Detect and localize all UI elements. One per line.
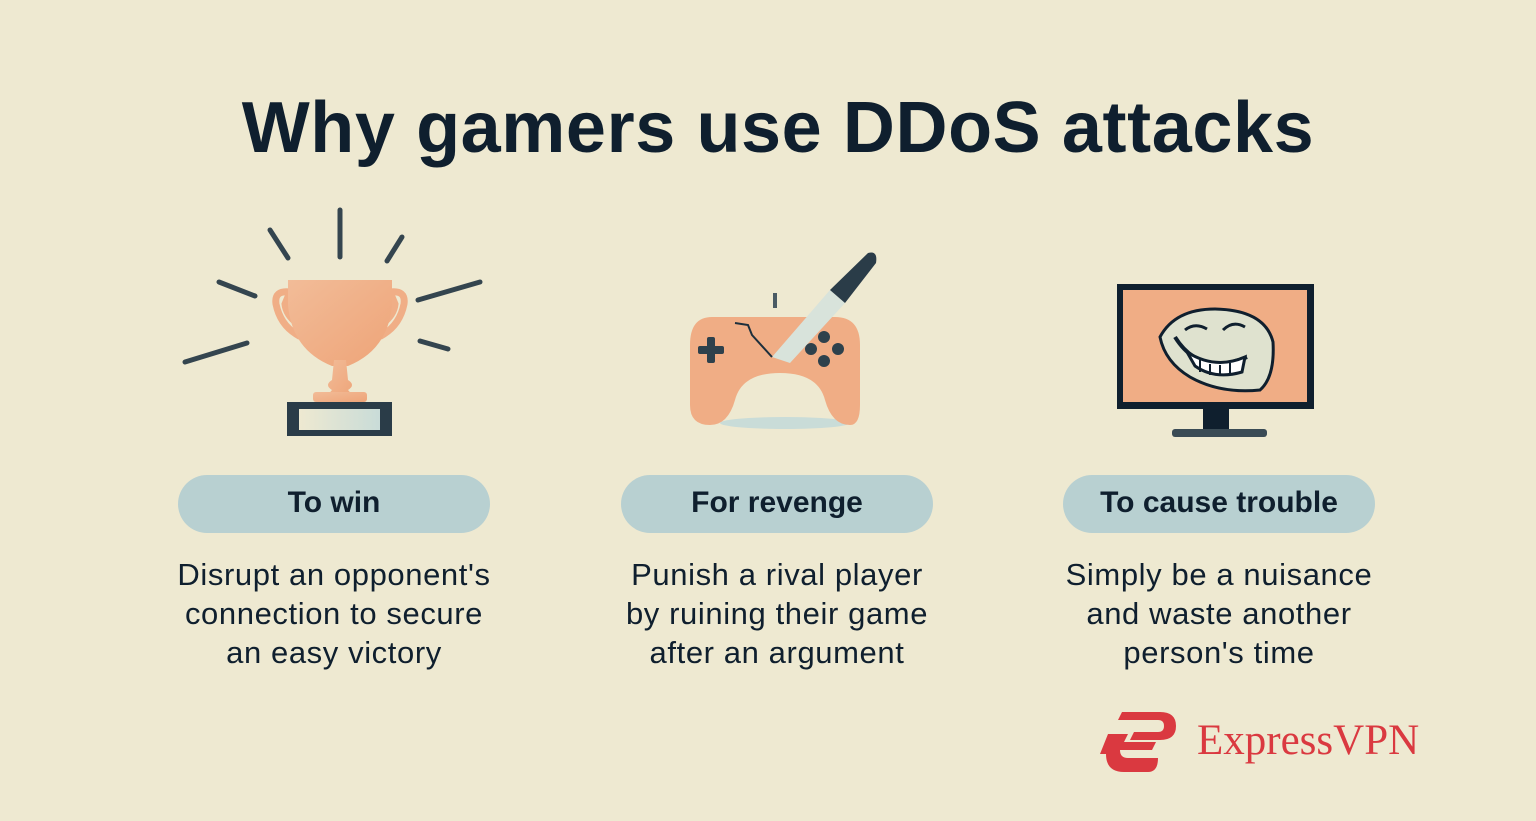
title: Why gamers use DDoS attacks: [242, 88, 1314, 168]
text: trouble description: Simply be a nuisance: [1066, 557, 1372, 592]
icon: monitor with troll face: [1117, 284, 1314, 437]
icon: trophy: [182, 208, 482, 436]
logo: ExpressVPN: ExpressVPN: [1197, 717, 1419, 764]
text: to win description: an easy victory: [226, 635, 442, 670]
text: to win description: Disrupt an opponent's: [177, 557, 491, 592]
logo: ExpressVPN: [1100, 712, 1419, 772]
text: revenge description: [626, 557, 928, 670]
pill: For revenge: [621, 475, 933, 533]
pill: To win: To win: [288, 486, 380, 519]
text: trouble description: person's time: [1123, 635, 1315, 670]
pill: For revenge: For revenge: [691, 486, 863, 519]
pill: To cause trouble: [1063, 475, 1375, 533]
pill: To win: [178, 475, 490, 533]
text: trouble description: [1066, 557, 1372, 670]
text: to win description: connection to secure: [185, 596, 483, 631]
text: to win description: [177, 557, 491, 670]
pill: To cause trouble: To cause trouble: [1100, 486, 1338, 519]
text: revenge description: after an argument: [650, 635, 904, 670]
text: trouble description: and waste another: [1086, 596, 1352, 631]
icon: game controller with knife: [690, 252, 876, 429]
text: revenge description: by ruining their game: [626, 596, 928, 631]
text: revenge description: Punish a rival player: [631, 557, 923, 592]
